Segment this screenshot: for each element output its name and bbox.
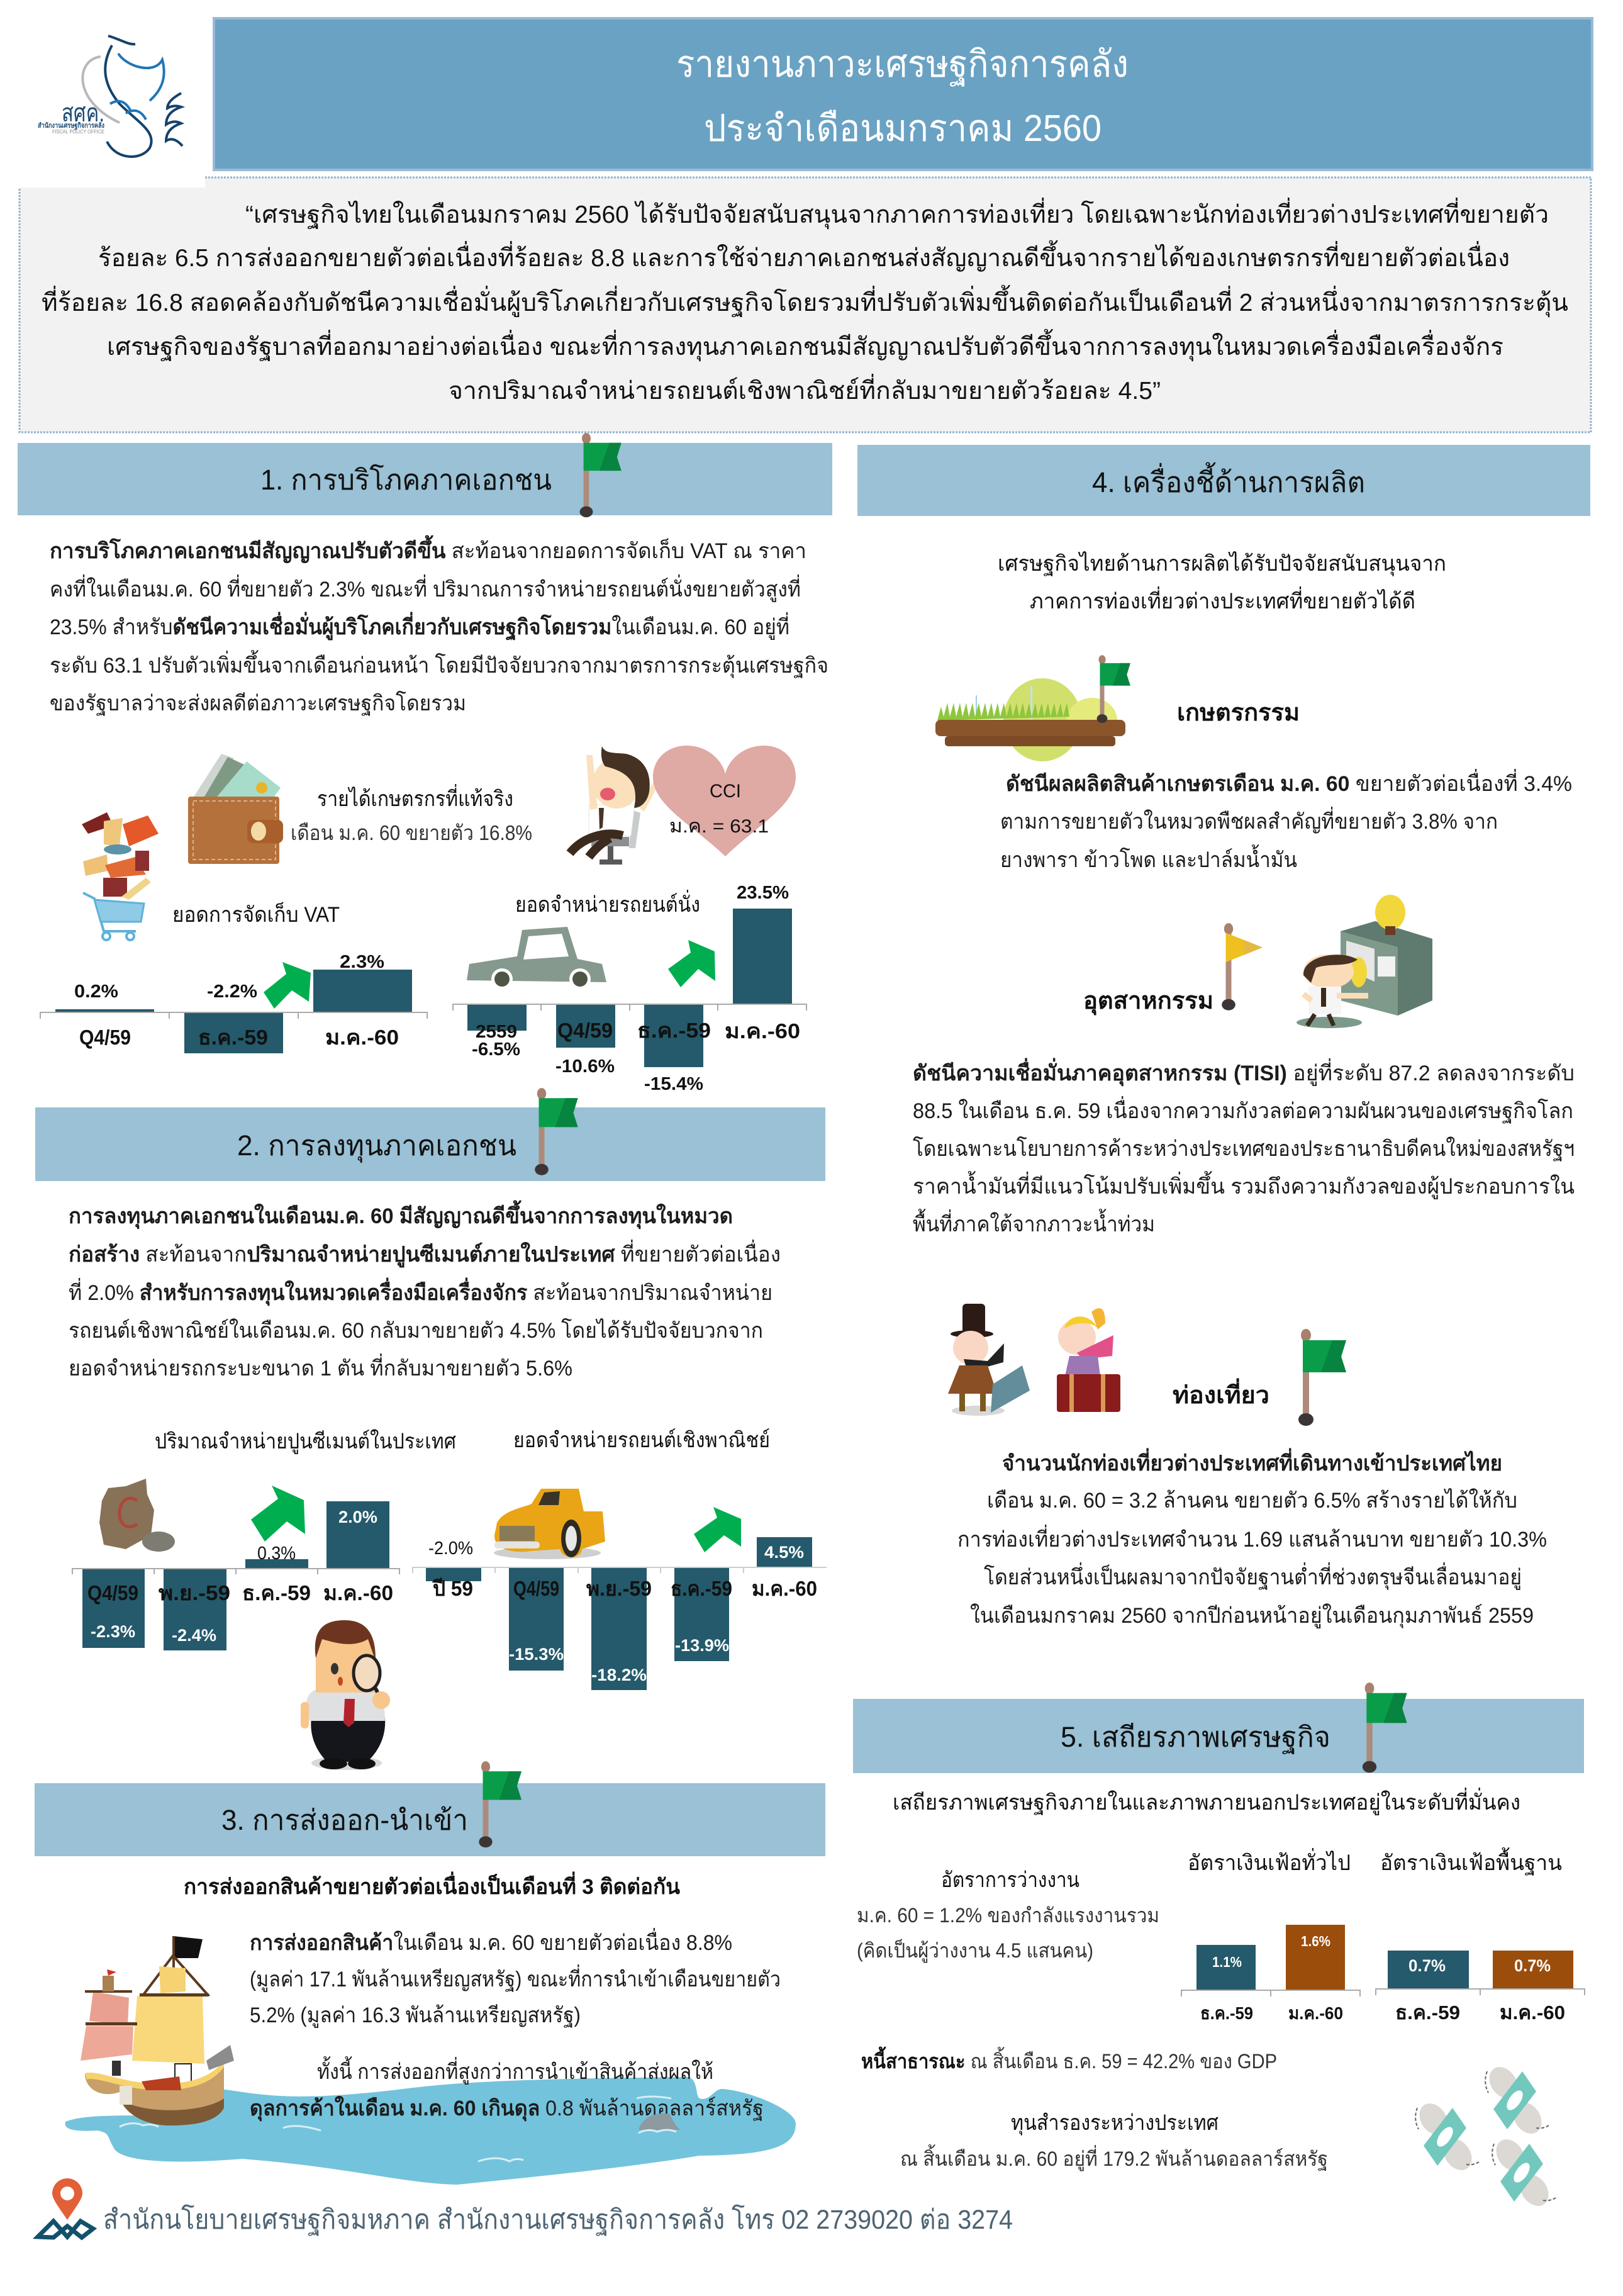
icon: pirate ship [81, 1936, 234, 2125]
reserves text: ณ สิ้นเดือน ม.ค. 60 อยู่ที่ 179.2 พันล้านดอลลาร์สหรัฐ [900, 2144, 1328, 2171]
unemployment text: อัตราการว่างงาน [941, 1868, 1079, 1892]
chart: passenger car sales: -10.6% [555, 1056, 615, 1077]
chart: commercial vehicle sales: 4.5% [764, 1543, 804, 1562]
title banner [214, 18, 1592, 170]
tourism paragraph: โดยส่วนหนึ่งเป็นผลมาจากปัจจัยฐานต่ำที่ช่วงตรุษจีนเลื่อนมาอยู่ [984, 1562, 1522, 1590]
chart: commercial vehicle sales: ยอดจำหน่ายรถยนต์เชิงพาณิชย์ [513, 1428, 770, 1452]
logo: FISCAL POLICY OFFICE [52, 129, 104, 135]
chart: passenger car sales: 2559 [476, 1022, 517, 1042]
industry paragraph: ดัชนีความเชื่อมั่นภาคอุตสาหกรรม (TISI) อยู่ที่ระดับ 87.2 ลดลงจากระดับ [913, 1058, 1575, 1087]
icon: grey car [467, 927, 606, 990]
chart: headline inflation: 1.1% [1212, 1954, 1242, 1970]
agriculture paragraph: ดัชนีผลผลิตสินค้าเกษตรเดือน ม.ค. 60 ขยายตัวต่อเนื่องที่ 3.4% [1006, 769, 1572, 796]
chart: cement sales: ม.ค.-60 [323, 1581, 393, 1604]
section 1 paragraph: คงที่ในเดือนม.ค. 60 ที่ขยายตัว 2.3% ขณะที่ ปริมาณการจำหน่ายรถยนต์นั่งขยายตัวสูงที่ [50, 574, 801, 602]
chart: commercial vehicle sales: ม.ค.-60 [752, 1577, 817, 1600]
section 4 header: 4. เครื่องชี้ด้านการผลิต [1092, 462, 1365, 498]
icon: happy man on chair [570, 746, 664, 865]
chart: commercial vehicle sales: ปี 59 [432, 1577, 473, 1600]
chart: cement sales: พ.ย.-59 [159, 1581, 230, 1604]
icon: man with magnifying glass [301, 1620, 390, 1770]
chart: commercial vehicle sales: -18.2% [591, 1666, 647, 1684]
summary quote panel: จากปริมาณจำหน่ายรถยนต์เชิงพาณิชย์ที่กลับมาขยายตัวร้อยละ 4.5” [449, 374, 1161, 405]
chart: VAT collection: ธ.ค.-59 [198, 1026, 268, 1049]
chart: core inflation [1376, 1847, 1585, 2024]
chart: VAT collection [40, 902, 427, 1053]
export paragraph: 5.2% (มูลค่า 16.3 พันล้านเหรียญสหรัฐ) [250, 2003, 581, 2028]
section 2 paragraph: รถยนต์เชิงพาณิชย์ในเดือนม.ค. 60 กลับมาขยายตัว 4.5% โดยได้รับปัจจัยบวกจาก [69, 1318, 763, 1343]
summary quote panel: เศรษฐกิจของรัฐบาลที่ออกมาอย่างต่อเนื่อง ขณะที่การลงทุนภาคเอกชนมีสัญญาณปรับตัวดีขึ้นจากการลงทุนในหมวดเครื่องมือเครื่องจักร [107, 328, 1503, 362]
industry paragraph: โดยเฉพาะนโยบายการค้าระหว่างประเทศของประธานาธิบดีคนใหม่ของสหรัฐฯ [913, 1136, 1575, 1162]
chart: passenger car sales: 23.5% [737, 883, 789, 903]
water [65, 2077, 796, 2185]
export paragraph: (มูลค่า 17.1 พันล้านเหรียญสหรัฐ) ขณะที่การนำเข้าเดือนขยายตัว [250, 1964, 781, 1992]
title banner: รายงานภาวะเศรษฐกิจการคลัง [676, 43, 1129, 87]
arrow: car sales up [668, 940, 715, 987]
icon: location pin [38, 2178, 93, 2237]
section 4 intro [998, 551, 1446, 613]
summary quote panel: ร้อยละ 6.5 การส่งออกขยายตัวต่อเนื่องที่ร้อยละ 8.8 และการใช้จ่ายภาคเอกชนส่งสัญญาณดีขึ้นจากรายได้ของเกษตรกรที่ขยายตัวต่อเนื่อง [98, 240, 1510, 272]
chart: cement sales [72, 1429, 456, 1650]
section 2 header: 2. การลงทุนภาคเอกชน [237, 1129, 516, 1163]
arrow: commercial up [694, 1507, 741, 1552]
reserves text: ทุนสำรองระหว่างประเทศ [1011, 2111, 1219, 2136]
chart: headline inflation [1181, 1848, 1360, 2023]
summary quote panel: “เศรษฐกิจไทยในเดือนมกราคม 2560 ได้รับปัจจัยสนับสนุนจากภาคการท่องเที่ยว โดยเฉพาะนักท่องเที่ยวต่างประเทศที่ขยายตัว [245, 198, 1549, 230]
icon: farmland [935, 678, 1125, 761]
agriculture heading: เกษตรกรรม [1177, 700, 1300, 726]
section 2 paragraph: ที่ 2.0% สำหรับการลงทุนในหมวดเครื่องมือเครื่องจักร สะท้อนจากปริมาณจำหน่าย [69, 1277, 772, 1306]
footer: สำนักนโยบายเศรษฐกิจมหภาค สำนักงานเศรษฐกิจการคลัง โทร 02 2739020 ต่อ 3274 [103, 2204, 1013, 2236]
chart: headline inflation: ธ.ค.-59 [1200, 2003, 1253, 2023]
logo: สศค. [62, 99, 104, 127]
chart: cement sales: ปริมาณจำหน่ายปูนซีเมนต์ในประเทศ [155, 1429, 456, 1454]
section 2 header [35, 1107, 825, 1181]
icon: cement bag [99, 1479, 175, 1552]
chart: passenger car sales: -6.5% [472, 1039, 520, 1060]
industry paragraph [913, 1058, 1575, 1236]
chart: core inflation: ธ.ค.-59 [1395, 2002, 1460, 2024]
chart: commercial vehicle sales [413, 1428, 827, 1690]
section 4 intro: เศรษฐกิจไทยด้านการผลิตได้รับปัจจัยสนับสนุนจาก [998, 551, 1446, 576]
flag: section 2 [535, 1088, 578, 1175]
agriculture paragraph [1000, 769, 1572, 872]
export paragraph: การส่งออกสินค้าในเดือน ม.ค. 60 ขยายตัวต่อเนื่อง 8.8% [250, 1928, 732, 1955]
chart: passenger car sales: ยอดจำหน่ายรถยนต์นั่ง [515, 890, 700, 917]
chart: cement sales: -2.3% [91, 1622, 135, 1641]
heart: CCI: CCI [710, 781, 741, 802]
chart: VAT collection: ยอดการจัดเก็บ VAT [172, 902, 340, 927]
section 2 paragraph: การลงทุนภาคเอกชนในเดือนม.ค. 60 มีสัญญาณดีขึ้นจากการลงทุนในหมวด [69, 1200, 733, 1229]
chart: cement sales: -2.4% [172, 1626, 216, 1645]
export paragraph: ทั้งนี้ การส่งออกที่สูงกว่าการนำเข้าสินค้าส่งผลให้ [317, 2056, 713, 2085]
summary quote panel: ที่ร้อยละ 16.8 สอดคล้องกับดัชนีความเชื่อมั่นผู้บริโภคเกี่ยวกับเศรษฐกิจโดยรวมที่ปรับตัวเพิ่มขึ้นติดต่อกันเป็นเดือนที่ 2 ส่วนหนึ่งจากมาตรการกระตุ้น [42, 284, 1568, 318]
heart: CCI: ม.ค. = 63.1 [669, 816, 769, 837]
agriculture paragraph: ตามการขยายตัวในหมวดพืชผลสำคัญที่ขยายตัว 3.8% จาก [1000, 807, 1498, 834]
farm income text: เดือน ม.ค. 60 ขยายตัว 16.8% [291, 821, 532, 844]
chart: commercial vehicle sales: พ.ย.-59 [586, 1577, 652, 1600]
chart: VAT collection: -2.2% [207, 982, 257, 1002]
chart: commercial vehicle sales: ธ.ค.-59 [671, 1577, 732, 1600]
chart: commercial vehicle sales: Q4/59 [513, 1577, 559, 1600]
icon: tourists [948, 1304, 1120, 1416]
agriculture paragraph: ยางพารา ข้าวโพด และปาล์มน้ำมัน [1000, 844, 1297, 872]
section 1 paragraph: การบริโภคภาคเอกชนมีสัญญาณปรับตัวดีขึ้น สะท้อนจากยอดการจัดเก็บ VAT ณ ราคา [50, 535, 806, 564]
icon: wallet [188, 754, 283, 864]
heart: CCI [653, 746, 796, 856]
tourism paragraph: เดือน ม.ค. 60 = 3.2 ล้านคน ขยายตัว 6.5% สร้างรายได้ให้กับ [987, 1488, 1517, 1513]
section 5 header [853, 1699, 1584, 1773]
section 1 paragraph: 23.5% สำหรับดัชนีความเชื่อมั่นผู้บริโภคเกี่ยวกับเศรษฐกิจโดยรวมในเดือนม.ค. 60 อยู่ที่ [50, 612, 789, 641]
unemployment text: ม.ค. 60 = 1.2% ของกำลังแรงงานรวม [857, 1904, 1159, 1927]
section 4 header [857, 445, 1590, 516]
chart: core inflation: 0.7% [1408, 1956, 1446, 1975]
farm income text: รายได้เกษตรกรที่แท้จริง [317, 784, 513, 811]
chart: commercial vehicle sales: -2.0% [428, 1538, 473, 1559]
chart: commercial vehicle sales: -15.3% [509, 1645, 564, 1664]
tourism paragraph: การท่องเที่ยวต่างประเทศจำนวน 1.69 แสนล้านบาท ขยายตัว 10.3% [957, 1525, 1547, 1552]
chart: passenger car sales [453, 883, 806, 1094]
chart: VAT collection: 2.3% [340, 952, 384, 972]
export paragraph [250, 1928, 781, 2122]
footer [38, 2178, 1013, 2237]
tourism paragraph: ในเดือนมกราคม 2560 จากปีก่อนหน้าอยู่ในเดือนกุมภาพันธ์ 2559 [970, 1603, 1534, 1628]
section 1 paragraph: ระดับ 63.1 ปรับตัวเพิ่มขึ้นจากเดือนก่อนหน้า โดยมีปัจจัยบวกจากมาตรการกระตุ้นเศรษฐกิจ [50, 650, 828, 678]
logo: สำนักงานเศรษฐกิจการคลัง [38, 121, 104, 130]
chart: commercial vehicle sales: -13.9% [675, 1636, 729, 1655]
chart: passenger car sales: Q4/59 [557, 1019, 613, 1042]
flag: section 1 [580, 433, 622, 517]
chart: headline inflation: ม.ค.-60 [1288, 2003, 1343, 2023]
stability subheading: เสถียรภาพเศรษฐกิจภายในและภาพภายนอกประเทศอยู่ในระดับที่มั่นคง [893, 1788, 1520, 1815]
tourism heading: ท่องเที่ยว [1173, 1378, 1269, 1409]
tourism paragraph [957, 1448, 1547, 1628]
industry heading: อุตสาหกรรม [1083, 988, 1213, 1016]
section 5 header: 5. เสถียรภาพเศรษฐกิจ [1061, 1721, 1330, 1754]
chart: headline inflation: อัตราเงินเฟ้อทั่วไป [1188, 1848, 1351, 1875]
export subheading: การส่งออกสินค้าขยายตัวต่อเนื่องเป็นเดือนที่ 3 ติดต่อกัน [184, 1871, 680, 1899]
chart: core inflation: ม.ค.-60 [1500, 2002, 1565, 2024]
unemployment text [857, 1868, 1159, 1963]
flag: section 5 [1363, 1683, 1407, 1772]
icon: yellow pickup truck [494, 1489, 605, 1559]
logo [0, 0, 205, 188]
flag: industry [1222, 923, 1263, 1011]
industry paragraph: 88.5 ในเดือน ธ.ค. 59 เนื่องจากความกังวลต่อความผันผวนของเศรษฐกิจโลก [913, 1096, 1573, 1124]
chart: passenger car sales: -15.4% [644, 1074, 703, 1094]
icon: man with idea machine [1297, 895, 1432, 1028]
flag: agriculture [1097, 655, 1130, 723]
chart: VAT collection: ม.ค.-60 [325, 1026, 399, 1049]
export paragraph: ดุลการค้าในเดือน ม.ค. 60 เกินดุล 0.8 พันล้านดอลลาร์สหรัฐ [250, 2095, 764, 2122]
unemployment text: (คิดเป็นผู้ว่างงาน 4.5 แสนคน) [857, 1939, 1093, 1963]
section 1 header [18, 443, 832, 515]
chart: core inflation: อัตราเงินเฟ้อพื้นฐาน [1380, 1847, 1562, 1876]
section 1 paragraph [50, 535, 828, 716]
chart: cement sales: ธ.ค.-59 [242, 1581, 311, 1604]
chart: cement sales: 0.3% [257, 1543, 296, 1564]
section 3 header [35, 1783, 825, 1856]
chart: VAT collection: Q4/59 [79, 1026, 131, 1049]
section 1 paragraph: ของรัฐบาลว่าจะส่งผลดีต่อภาวะเศรษฐกิจโดยรวม [50, 691, 466, 716]
chart: cement sales: 2.0% [338, 1508, 377, 1526]
arrow: cement up [251, 1486, 305, 1542]
icon: shopping cart with goods [82, 812, 159, 940]
public debt text: หนี้สาธารณะ ณ สิ้นเดือน ธ.ค. 59 = 42.2% ของ GDP [861, 2046, 1277, 2073]
section 2 paragraph: ยอดจำหน่ายรถกระบะขนาด 1 ตัน ที่กลับมาขยายตัว 5.6% [69, 1353, 572, 1380]
chart: core inflation: 0.7% [1514, 1956, 1551, 1975]
section 4 intro: ภาคการท่องเที่ยวต่างประเทศที่ขยายตัวได้ดี [1030, 586, 1415, 613]
reserves text [900, 2111, 1328, 2171]
section 3 header: 3. การส่งออก-นำเข้า [221, 1804, 468, 1836]
tourism paragraph: จำนวนนักท่องเที่ยวต่างประเทศที่เดินทางเข้าประเทศไทย [1002, 1448, 1502, 1476]
chart: headline inflation: 1.6% [1301, 1933, 1330, 1949]
chart: VAT collection: 0.2% [74, 982, 118, 1002]
farm income text [291, 784, 532, 844]
section 2 paragraph: ก่อสร้าง สะท้อนจากปริมาณจำหน่ายปูนซีเมนต์ภายในประเทศ ที่ขยายตัวต่อเนื่อง [69, 1240, 781, 1268]
section 2 paragraph [69, 1200, 781, 1380]
chart: cement sales: Q4/59 [87, 1581, 138, 1604]
industry paragraph: ราคาน้ำมันที่มีแนวโน้มปรับเพิ่มขึ้น รวมถึงความกังวลของผู้ประกอบการใน [913, 1171, 1575, 1199]
section 1 header: 1. การบริโภคภาคเอกชน [260, 464, 552, 496]
chart: passenger car sales: ม.ค.-60 [725, 1019, 800, 1043]
icon: flying money [1414, 2061, 1556, 2212]
arrow: VAT up [264, 962, 311, 1009]
summary quote panel [20, 177, 1591, 432]
industry paragraph: พื้นที่ภาคใต้จากภาวะน้ำท่วม [913, 1209, 1155, 1236]
title banner: ประจำเดือนมกราคม 2560 [704, 108, 1102, 149]
chart: passenger car sales: ธ.ค.-59 [637, 1019, 711, 1042]
flag: tourism [1298, 1329, 1346, 1426]
flag: section 3 [479, 1761, 521, 1847]
icon: dolphin fin [120, 2097, 681, 2161]
